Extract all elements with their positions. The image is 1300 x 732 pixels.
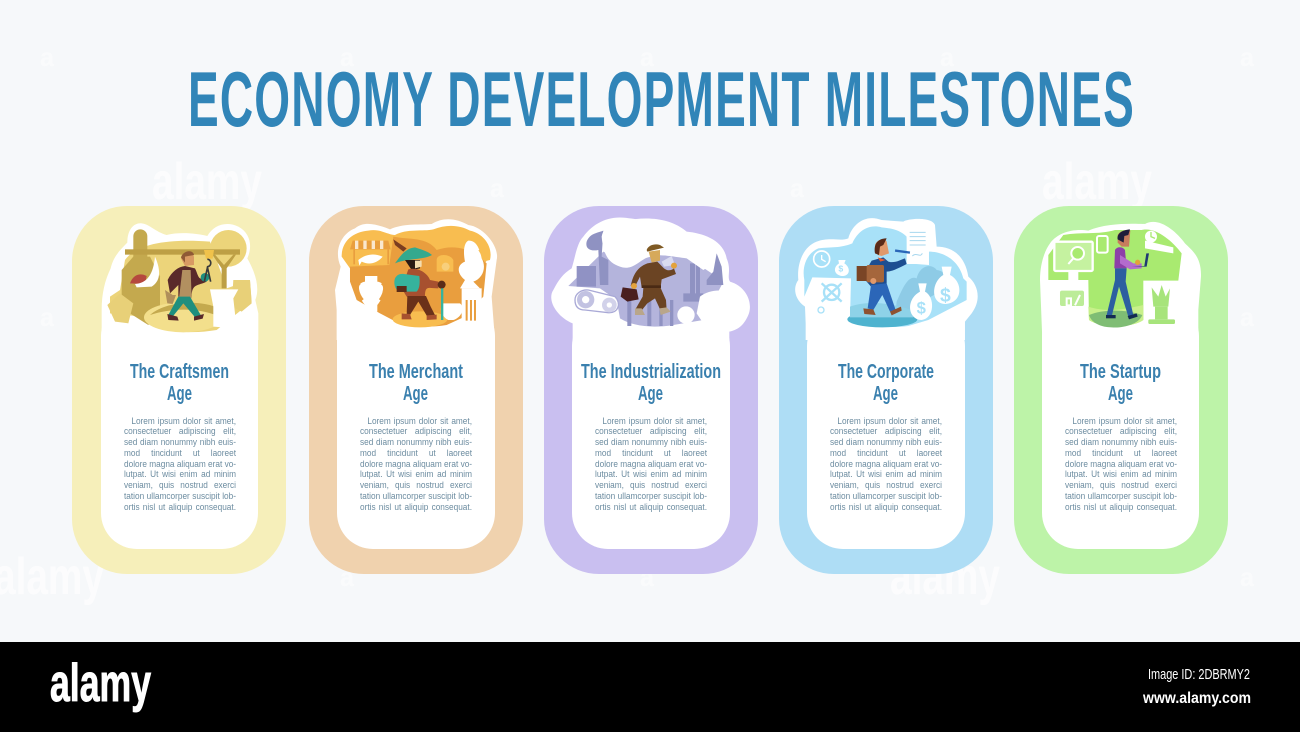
body text: startup: consectetuer adipiscing elit,: [1065, 426, 1177, 436]
panel: merchant age card: [309, 206, 523, 574]
watermarks: a: [40, 42, 55, 72]
panel: startup age card: [1014, 206, 1228, 574]
illustration: corporate businessman: $: [917, 298, 927, 317]
body text: corporate: mod tincidunt ut laoreet: [830, 448, 942, 458]
watermarks: a: [340, 42, 355, 72]
body text: merchant: sed diam nonummy nibh euis-: [360, 437, 472, 447]
heading: the merchant age: The Merchant: [369, 361, 463, 383]
body text: corporate: ortis nisl ut aliquip consequat.: [830, 502, 942, 512]
heading: the corporate age: Age: [873, 383, 898, 405]
watermarks: a: [40, 302, 55, 332]
heading: the industrialization age: Age: [638, 383, 663, 405]
body text: startup: ortis nisl ut aliquip consequat.: [1065, 502, 1177, 512]
body text: corporate: veniam, quis nostrud exerci: [830, 480, 942, 490]
watermarks: a: [1240, 42, 1255, 72]
heading: the industrialization age: The Industrialization: [581, 361, 721, 383]
body text: industrialization: sed diam nonummy nibh euis-: [595, 437, 707, 447]
body text: industrialization: Lorem ipsum dolor sit amet,: [602, 416, 707, 426]
body text: industrialization: consectetuer adipiscing elit,: [595, 426, 707, 436]
body text: corporate: Lorem ipsum dolor sit amet,: [837, 416, 942, 426]
illustration: merchant with goods: [335, 219, 497, 340]
watermarks: alamy: [890, 548, 1000, 606]
body text: corporate: dolore magna aliquam erat vo-: [830, 458, 942, 468]
panel: industrialization age card: [544, 206, 758, 574]
body text: corporate: lutpat. Ut wisi enim ad minim: [830, 469, 942, 479]
body text: merchant: consectetuer adipiscing elit,: [360, 426, 472, 436]
body text: startup: [1065, 416, 1177, 512]
watermarks: a: [490, 173, 505, 203]
body text: startup: veniam, quis nostrud exerci: [1065, 480, 1177, 490]
body text: corporate: sed diam nonummy nibh euis-: [830, 437, 942, 447]
watermarks: alamy: [1042, 153, 1152, 211]
heading: the corporate age: [838, 361, 934, 405]
illustration: startup founder: [1040, 222, 1201, 340]
illustration: corporate businessman: $: [940, 286, 951, 307]
body text: merchant: dolore magna aliquam erat vo-: [360, 458, 472, 468]
body text: startup: sed diam nonummy nibh euis-: [1065, 437, 1177, 447]
body text: industrialization: [595, 416, 707, 512]
panel: corporate age card: [779, 206, 993, 574]
illustration: industrial worker: [551, 218, 750, 340]
watermarks: [0, 42, 1255, 606]
body text: startup: tation ullamcorper suscipit lob-: [1065, 491, 1177, 501]
watermarks: a: [640, 562, 655, 592]
body text: merchant: [360, 416, 472, 512]
heading: the corporate age: The Corporate: [838, 361, 934, 383]
body text: craftsmen: lutpat. Ut wisi enim ad minim: [124, 469, 236, 479]
body text: merchant: Lorem ipsum dolor sit amet,: [367, 416, 472, 426]
body text: craftsmen: veniam, quis nostrud exerci: [124, 480, 236, 490]
body text: merchant: lutpat. Ut wisi enim ad minim: [360, 469, 472, 479]
body text: craftsmen: Lorem ipsum dolor sit amet,: [131, 416, 236, 426]
body text: craftsmen: mod tincidunt ut laoreet: [124, 448, 236, 458]
heading: the industrialization age: [581, 361, 721, 405]
heading: the craftsmen age: Age: [167, 383, 192, 405]
body text: craftsmen: tation ullamcorper suscipit lob-: [124, 491, 236, 501]
body text: industrialization: lutpat. Ut wisi enim ad minim: [595, 469, 707, 479]
body text: corporate: [830, 416, 942, 512]
body text: craftsmen: ortis nisl ut aliquip consequat.: [124, 502, 236, 512]
illustration: corporate businessman: $: [838, 264, 843, 274]
illustration: corporate businessman: [795, 218, 978, 340]
body text: craftsmen: [124, 416, 236, 512]
body text: corporate: consectetuer adipiscing elit,: [830, 426, 942, 436]
body text: merchant: ortis nisl ut aliquip consequat.: [360, 502, 472, 512]
body text: startup: dolore magna aliquam erat vo-: [1065, 458, 1177, 468]
body text: industrialization: ortis nisl ut aliquip consequat.: [595, 502, 707, 512]
watermarks: a: [1240, 302, 1255, 332]
illustration: craftsman at forge: [102, 223, 258, 340]
body text: craftsmen: dolore magna aliquam erat vo-: [124, 458, 236, 468]
body text: industrialization: tation ullamcorper suscipit lob-: [595, 491, 707, 501]
heading: the startup age: [1080, 361, 1161, 405]
heading: the craftsmen age: [130, 361, 229, 405]
watermarks: a: [640, 42, 655, 72]
watermarks: a: [490, 432, 505, 462]
body text: industrialization: dolore magna aliquam erat vo-: [595, 458, 707, 468]
watermarks: a: [940, 42, 955, 72]
body text: craftsmen: consectetuer adipiscing elit,: [124, 426, 236, 436]
body text: startup: mod tincidunt ut laoreet: [1065, 448, 1177, 458]
watermarks: a: [790, 432, 805, 462]
heading: the merchant age: [369, 361, 463, 405]
watermarks: a: [1240, 562, 1255, 592]
body text: craftsmen: sed diam nonummy nibh euis-: [124, 437, 236, 447]
footer bar: [0, 642, 1300, 732]
body text: corporate: tation ullamcorper suscipit lob-: [830, 491, 942, 501]
footer logo: alamy: [50, 654, 151, 713]
body text: merchant: tation ullamcorper suscipit lob-: [360, 491, 472, 501]
title: ECONOMY DEVELOPMENT MILESTONES: [188, 55, 1134, 143]
heading: the startup age: The Startup: [1080, 361, 1161, 383]
heading: the merchant age: Age: [403, 383, 428, 405]
body text: merchant: mod tincidunt ut laoreet: [360, 448, 472, 458]
body text: industrialization: mod tincidunt ut laoreet: [595, 448, 707, 458]
watermarks: alamy: [152, 153, 262, 211]
panel: craftsmen age card: [72, 206, 286, 574]
body text: industrialization: veniam, quis nostrud exerci: [595, 480, 707, 490]
website url: www.alamy.com: [1142, 690, 1251, 707]
body text: merchant: veniam, quis nostrud exerci: [360, 480, 472, 490]
watermarks: a: [340, 562, 355, 592]
watermarks: a: [790, 173, 805, 203]
body text: startup: Lorem ipsum dolor sit amet,: [1072, 416, 1177, 426]
image id: Image ID: 2DBRMY2: [1148, 666, 1250, 683]
heading: the craftsmen age: The Craftsmen: [130, 361, 229, 383]
heading: the startup age: Age: [1108, 383, 1133, 405]
body text: startup: lutpat. Ut wisi enim ad minim: [1065, 469, 1177, 479]
